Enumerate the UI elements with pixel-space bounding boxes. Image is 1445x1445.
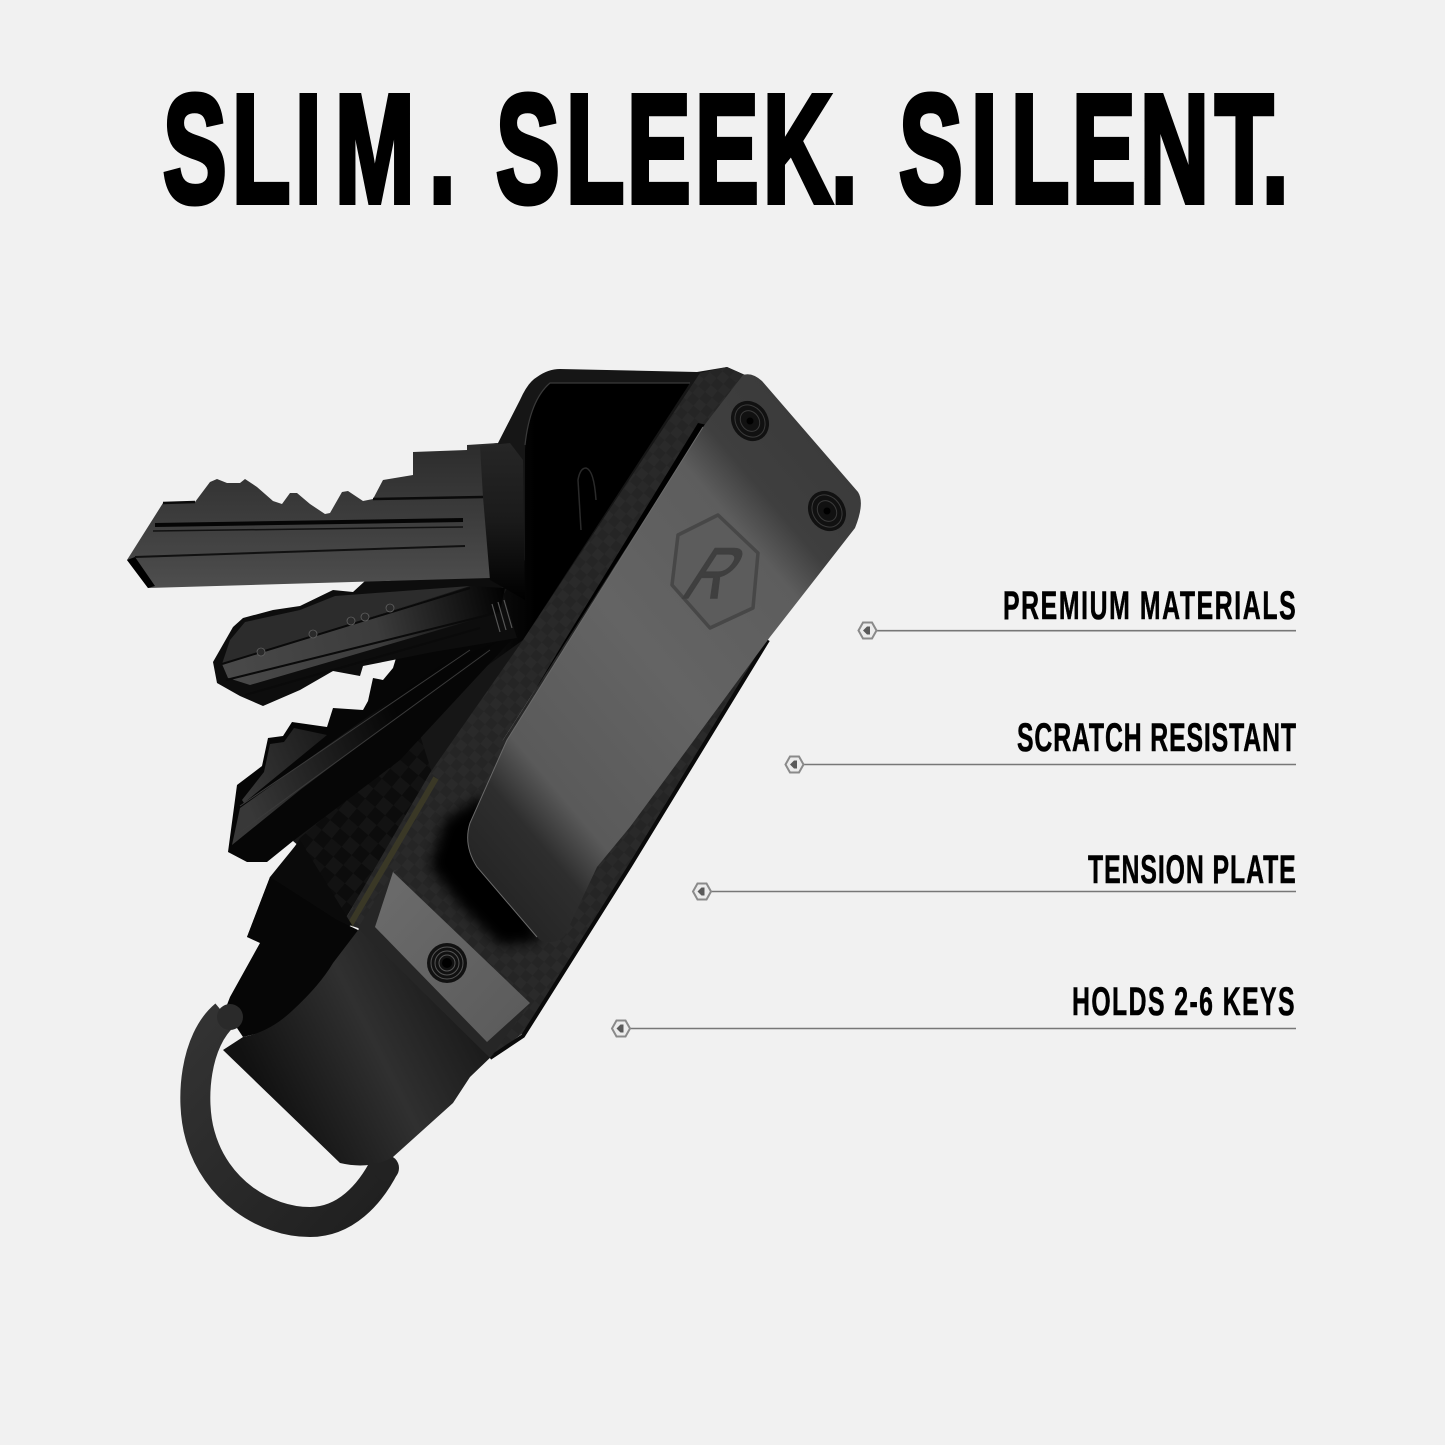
callout: holds 2-6 keys	[612, 980, 1296, 1036]
icon: hex bolt	[693, 884, 711, 900]
olive edge stripe	[350, 778, 436, 925]
logo hexagon: R	[668, 534, 761, 614]
callout: holds 2-6 keys: HOLDS 2-6 KEYS	[1072, 980, 1295, 1025]
title: SLEEK.	[496, 64, 858, 236]
callout: tension plate	[693, 848, 1296, 900]
carbon rail	[343, 367, 745, 928]
right carbon edge	[393, 425, 768, 1058]
key 3	[228, 638, 513, 862]
title: SLIM.	[163, 64, 456, 236]
icon: hex bolt	[858, 622, 876, 638]
callout: premium materials	[858, 584, 1296, 638]
body outer edge	[490, 640, 768, 1058]
clip shadow	[430, 795, 540, 945]
callout: tension plate: TENSION PLATE	[1088, 848, 1296, 893]
screw top right	[800, 483, 854, 539]
upper left notch	[247, 840, 352, 940]
callout: premium materials: PREMIUM MATERIALS	[1003, 584, 1296, 629]
black inner of loop	[225, 877, 358, 1037]
screw bottom	[427, 943, 467, 983]
metal strip	[358, 872, 530, 1058]
key 1	[127, 443, 525, 600]
belt clip and top plate	[468, 374, 861, 942]
screw top left	[723, 393, 777, 449]
icon: hex bolt	[612, 1020, 630, 1036]
icon: hex bolt	[786, 756, 804, 772]
callout: scratch resistant: SCRATCH RESISTANT	[1017, 716, 1296, 761]
lower carbon panel	[272, 735, 432, 923]
product: key organizer	[127, 367, 861, 1222]
back housing	[293, 367, 745, 905]
title	[163, 64, 1289, 236]
callout: scratch resistant	[786, 716, 1296, 772]
rail groove	[484, 423, 707, 782]
bottom loop body	[223, 925, 494, 1165]
split ring	[195, 1004, 399, 1222]
title: SILENT.	[899, 64, 1289, 236]
key 2	[213, 572, 517, 706]
